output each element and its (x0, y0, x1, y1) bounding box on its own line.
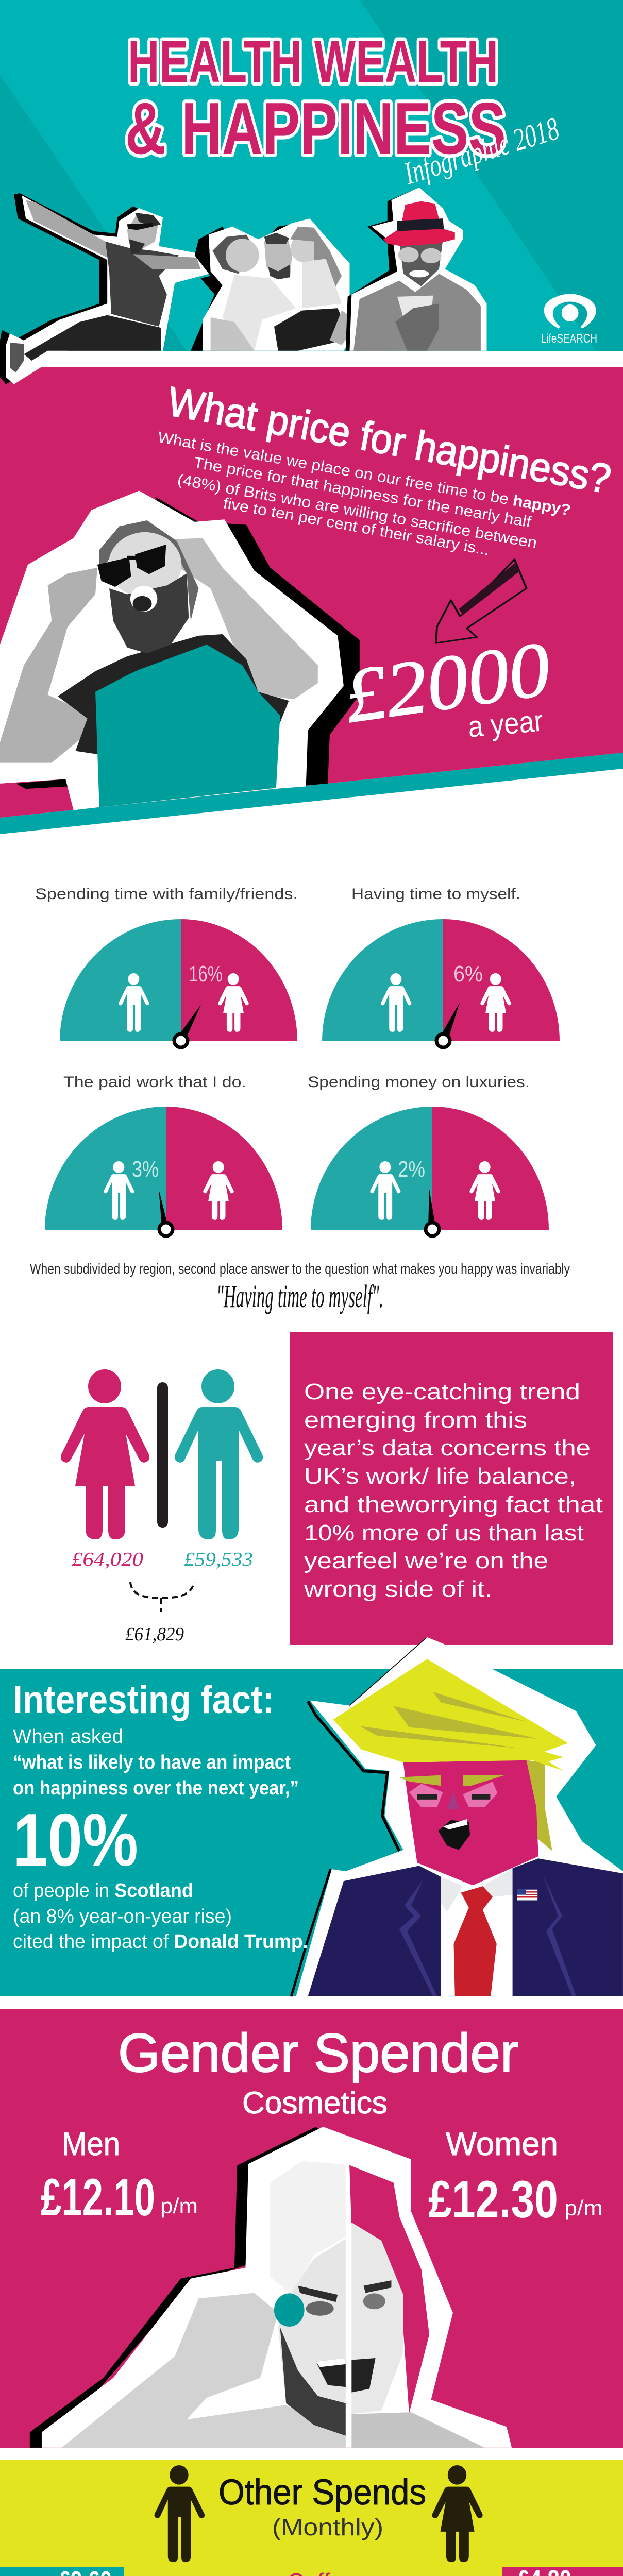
chart: gauge time to myself: Having time to myself. (351, 886, 520, 903)
callout: work life balance: year’s data concerns the (304, 1435, 591, 1461)
text block: Trump question: on happiness over the next year,” (13, 1777, 299, 1799)
photo: dancing man (0, 193, 209, 384)
subtitle: Infographic 2018: Infographic 2018 (400, 111, 563, 192)
stat: 10 percent: 10% (13, 1798, 138, 1882)
chart: gauge paid work (45, 1074, 282, 1236)
text block: Scotland result: of people in Scotland (13, 1880, 193, 1902)
heading: gender spender: Cosmetics (242, 2086, 388, 2120)
stat: women cosmetics: p/m (564, 2196, 603, 2220)
bar chart: coffee (0, 2565, 623, 2576)
icon: gender salary comparison: £59,533 (184, 1549, 253, 1570)
chart: gauge family and friends (35, 886, 298, 1047)
text block: Trump question: When asked (13, 1726, 123, 1748)
heading: gender spender (118, 2023, 518, 2120)
logo: LifeSearch header: LifeSEARCH (541, 332, 597, 346)
panel: header background (0, 0, 623, 351)
chart: gauge family and friends: 16% (189, 961, 223, 987)
callout: work life balance: 10% more of us than last (304, 1520, 584, 1546)
arrow: hand-drawn pointing down left (436, 560, 527, 643)
stat: women cosmetics: Women (446, 2125, 558, 2162)
stat: men cosmetics: £12.10 (41, 2168, 155, 2227)
callout: work life balance: and theworrying fact that (304, 1492, 603, 1517)
illustration: Donald Trump caricature (291, 1637, 623, 1996)
panel: what price for happiness background (0, 367, 623, 834)
quote: having time to myself: "Having time to myself". (216, 1279, 383, 1314)
text block: Trump question (13, 1726, 299, 1799)
chart: gauge time to myself: 6% (453, 961, 483, 987)
stat: men cosmetics: p/m (160, 2194, 198, 2218)
text block: Scotland result: (an 8% year-on-year rise) (13, 1906, 232, 1927)
stat: men cosmetics (41, 2125, 198, 2227)
chart: gauge luxuries (308, 1074, 549, 1236)
panel: gender spender background (0, 2009, 623, 2448)
stat: 2000 pounds a year: £2000 (339, 626, 555, 739)
title: & HAPPINESS (125, 88, 506, 170)
heading: interesting fact: Interesting fact: (13, 1678, 274, 1722)
panel: interesting fact background (0, 1669, 623, 1996)
text block: Trump question: “what is likely to have an impact (13, 1752, 291, 1773)
text block: price for happiness intro: What is the value we place on our free time to be happy? (157, 429, 572, 519)
icon: gender salary comparison (61, 1369, 263, 1645)
chart: gauge family and friends: Spending time with family/friends. (35, 886, 298, 903)
icon: gender salary comparison: £61,829 (125, 1623, 184, 1645)
chart: gauge time to myself (322, 886, 560, 1047)
heading: other spends with figures: Other Spends (218, 2472, 426, 2512)
text block: Scotland result: cited the impact of Donald Trump. (13, 1931, 308, 1953)
photo: laughing man with sunglasses (0, 491, 360, 810)
callout: work life balance: One eye-catching trend (304, 1379, 580, 1404)
text block: Scotland result (13, 1880, 308, 1953)
stat: 2000 pounds a year: a year (466, 704, 545, 744)
text block: price for happiness intro: five to ten per cent of their salary is... (222, 495, 491, 559)
text block: price for happiness intro (157, 429, 572, 559)
chart: gauge luxuries: Spending money on luxuries. (308, 1074, 530, 1091)
title: HEALTH WEALTH (128, 29, 498, 95)
callout: work life balance: yearfeel we’re on the (304, 1548, 548, 1573)
photo: laughing family (191, 218, 362, 351)
photo: woman with red hat and mug (346, 188, 486, 351)
heading: gender spender: Gender Spender (118, 2023, 518, 2083)
chart: gauge paid work: 3% (132, 1157, 159, 1182)
stat: women cosmetics: £12.30 (428, 2170, 558, 2229)
panel: other spends background (0, 2460, 623, 2576)
callout: work life balance: wrong side of it. (304, 1577, 492, 1602)
stat: men cosmetics: Men (62, 2125, 120, 2162)
icon: gender salary comparison: £64,020 (72, 1549, 143, 1570)
callout: work life balance (290, 1332, 613, 1645)
callout: work life balance: emerging from this (304, 1408, 527, 1433)
heading: other spends with figures: (Monthly) (272, 2514, 383, 2540)
chart: gauge luxuries: 2% (398, 1157, 425, 1182)
photo: half man half woman face mask (30, 2127, 512, 2448)
text block: price for happiness intro: The price for that happiness for the nearly half (192, 454, 533, 531)
title (125, 29, 506, 170)
heading: other spends with figures (154, 2465, 483, 2562)
text block: price for happiness intro: (48%) of Brits who are willing to sacrifice between (176, 471, 538, 552)
logo: LifeSearch header (541, 294, 597, 346)
callout: work life balance: UK’s work/ life balance, (304, 1464, 576, 1489)
chart: gauge paid work: The paid work that I do. (63, 1074, 246, 1091)
stat: women cosmetics (428, 2125, 603, 2229)
